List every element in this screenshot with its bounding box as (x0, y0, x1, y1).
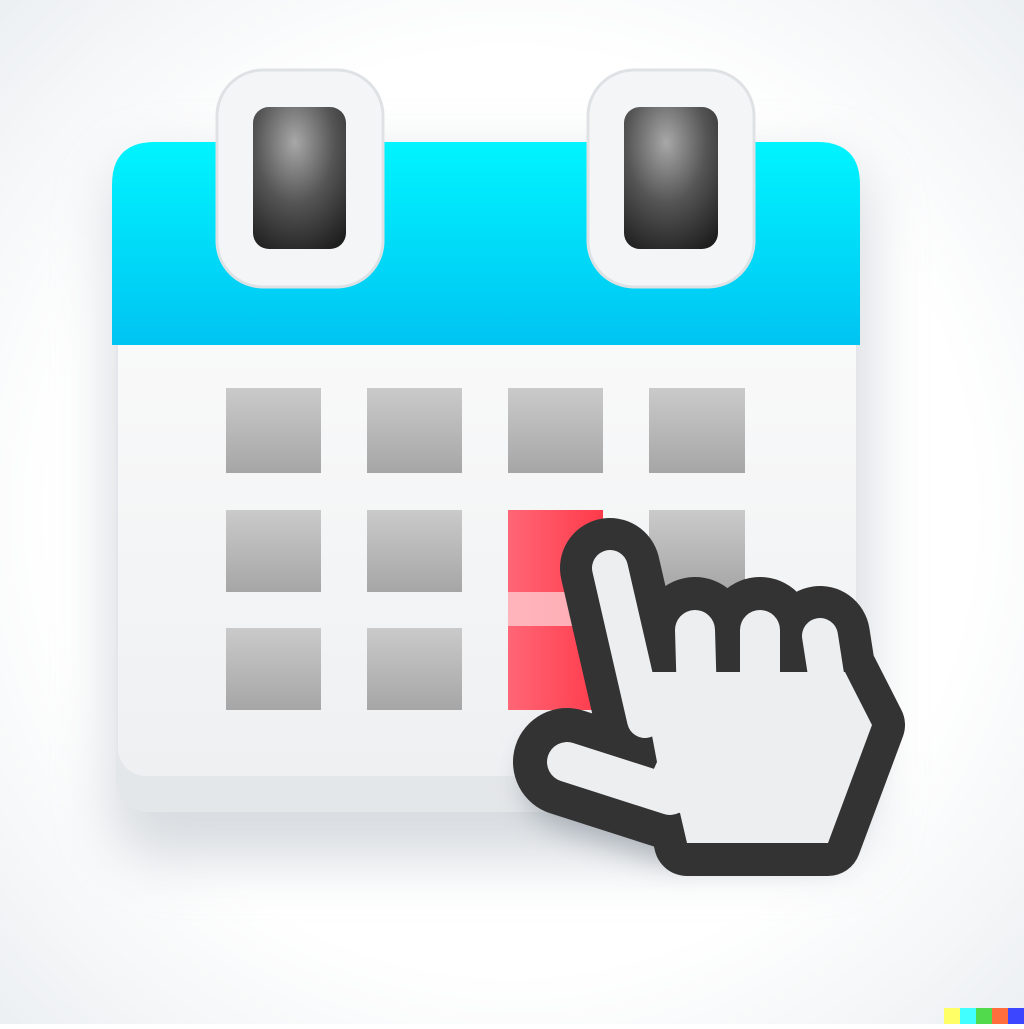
panel: calendar header (112, 142, 860, 345)
selected day (red) (508, 510, 603, 710)
icon: pointing hand (567, 568, 878, 861)
grid of days (226, 388, 745, 710)
icon: right ring (588, 70, 754, 287)
color strip (944, 1008, 1024, 1024)
icon: left ring (217, 70, 383, 287)
shadow (110, 160, 870, 860)
panel: calendar body (116, 300, 858, 812)
